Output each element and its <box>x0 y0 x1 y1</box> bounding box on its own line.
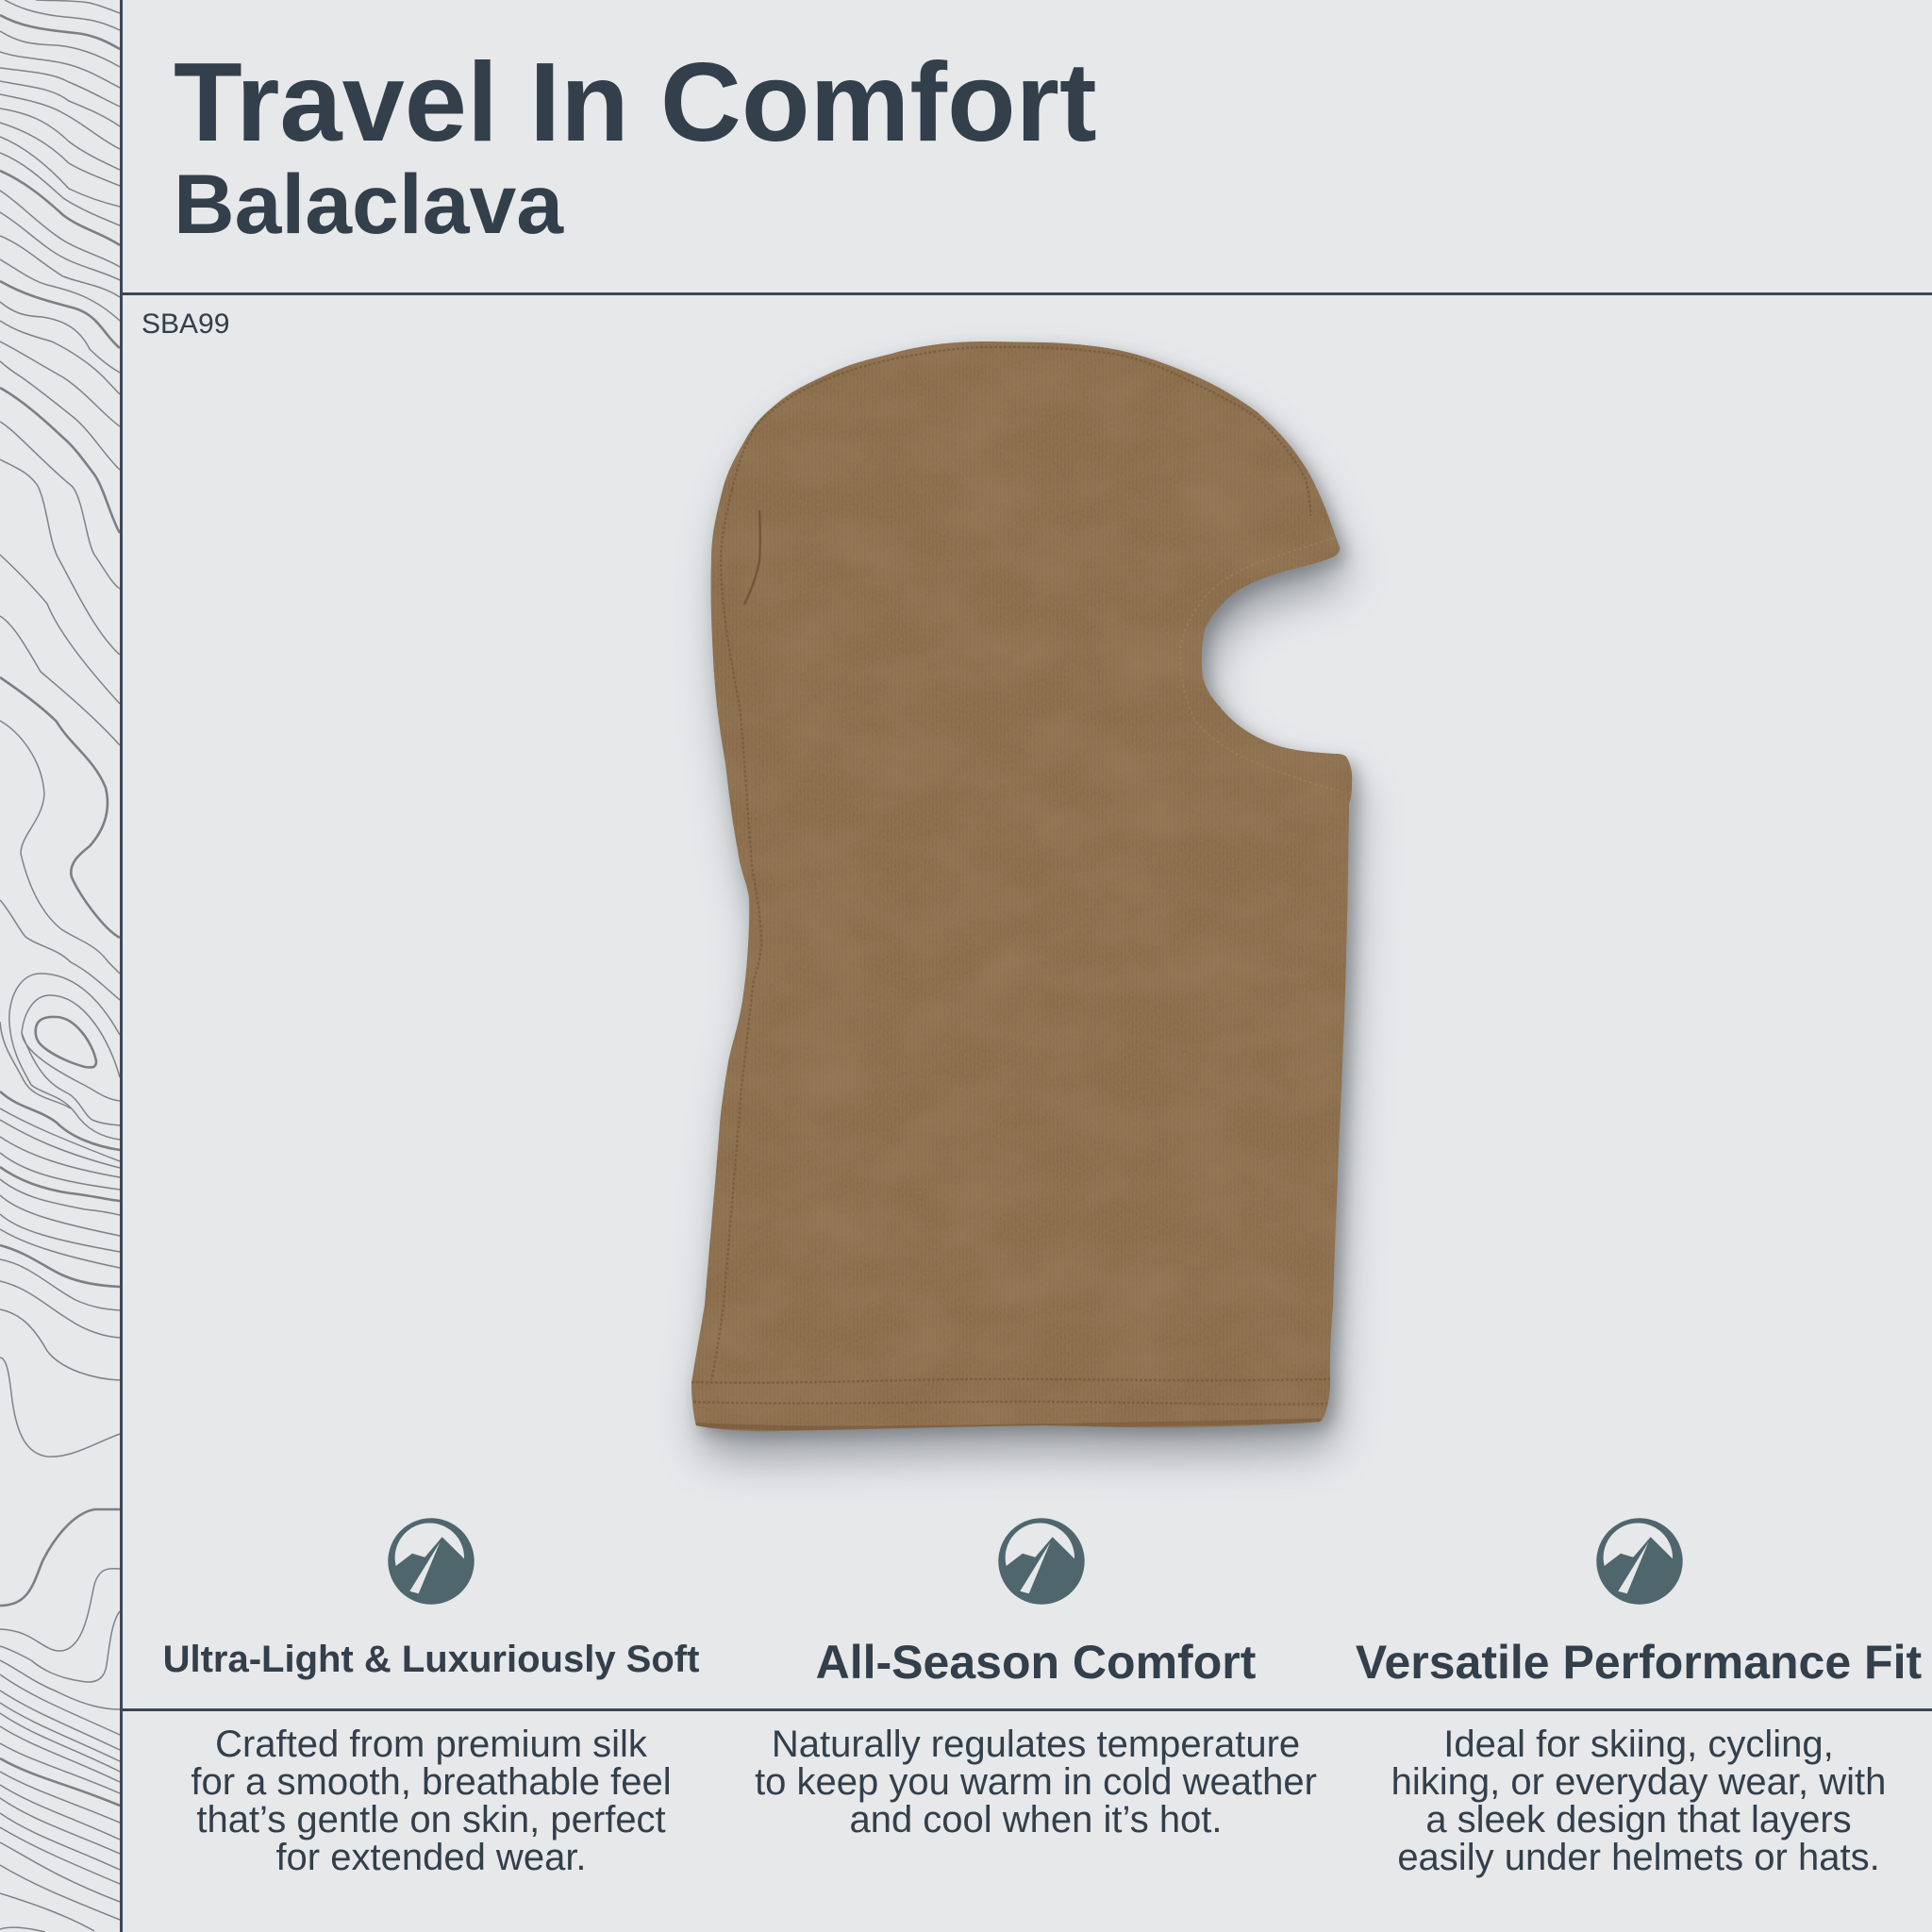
text block: versatile description <box>1391 1724 1886 1878</box>
icon: mountain badge, column 1 <box>388 1518 475 1605</box>
heading: ultra-light: Ultra-Light & Luxuriously Soft <box>163 1639 699 1680</box>
subtitle: Balaclava <box>174 157 564 251</box>
text block: all-season description: to keep you warm in cold weather <box>755 1761 1317 1803</box>
product code: SBA99 <box>142 308 229 340</box>
text block: versatile description: a sleek design that layers <box>1425 1799 1852 1840</box>
text block: ultra-light description <box>191 1724 672 1878</box>
text block: versatile description: easily under helmets or hats. <box>1397 1837 1880 1878</box>
topographic contour side panel <box>0 0 120 1932</box>
text block: ultra-light description: for a smooth, breathable feel <box>191 1761 672 1803</box>
title: Travel In Comfort <box>174 40 1097 165</box>
text block: all-season description: Naturally regulates temperature <box>772 1724 1300 1765</box>
text block: all-season description <box>755 1724 1317 1840</box>
product image: balaclava <box>679 330 1359 1459</box>
text block: ultra-light description: for extended wear. <box>275 1837 587 1878</box>
text block: versatile description: hiking, or everyday wear, with <box>1391 1761 1886 1803</box>
heading: all-season: All-Season Comfort <box>816 1636 1257 1689</box>
icon: mountain badge, column 2 <box>998 1518 1085 1605</box>
text block: ultra-light description: that’s gentle on skin, perfect <box>196 1799 666 1840</box>
text block: ultra-light description: Crafted from premium silk <box>215 1724 648 1765</box>
heading: versatile: Versatile Performance Fit <box>1356 1636 1922 1689</box>
text block: versatile description: Ideal for skiing, cycling, <box>1443 1724 1834 1765</box>
text block: all-season description: and cool when it’s hot. <box>849 1799 1223 1840</box>
icon: mountain badge, column 3 <box>1596 1518 1683 1605</box>
